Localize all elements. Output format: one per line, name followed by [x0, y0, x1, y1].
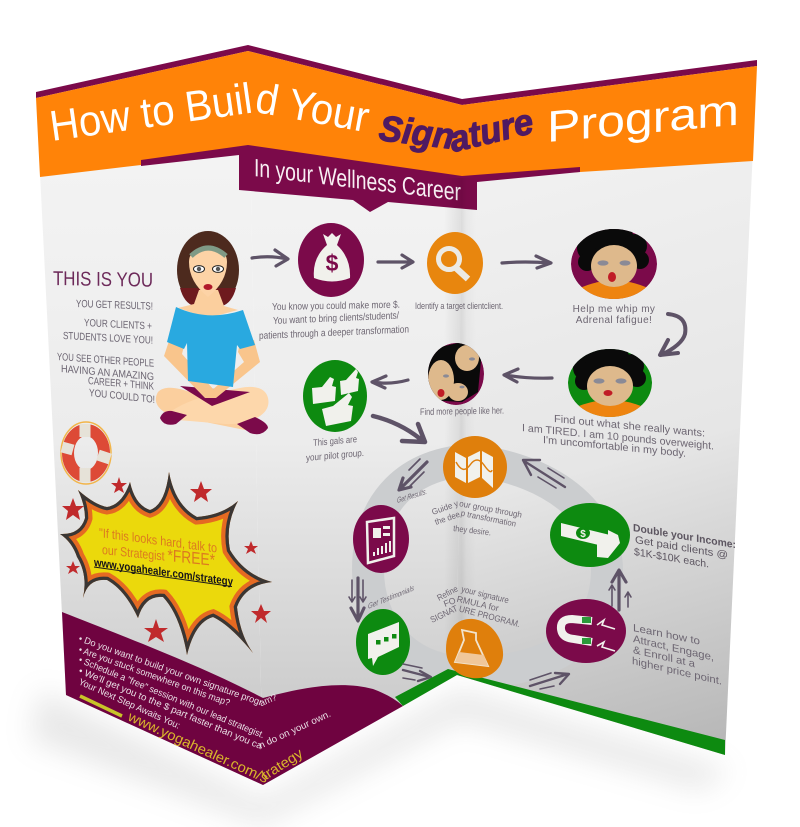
- green bottom strip: [395, 669, 725, 755]
- icon: client face green: [568, 349, 652, 417]
- icon: thumbs up: [303, 360, 367, 432]
- icon: group of women: [428, 340, 484, 405]
- icon: money bag: $: [326, 250, 339, 276]
- arrows: magnet to dollar: [609, 570, 631, 610]
- text: double your income: Double your Income:: [633, 522, 736, 551]
- callout link: www.yogahealer.com/strategy: [93, 557, 233, 589]
- illustration: seated woman: [156, 231, 268, 434]
- header orange band: [36, 51, 757, 178]
- arrow: group to thumbs: [372, 376, 408, 388]
- text: double your income: $1K-$10K each.: [634, 546, 709, 571]
- icon: chat bubble: [356, 609, 410, 675]
- neck: [178, 290, 238, 318]
- text: guide your group: [432, 501, 522, 536]
- text: pilot group: your pilot group.: [306, 448, 364, 464]
- eyes: [194, 266, 204, 272]
- shoes: [160, 411, 187, 425]
- panel: right brochure panel: [457, 62, 757, 755]
- icon: dollar bill hand: [550, 503, 630, 567]
- text block: call to action bullets: • Schedule a "free" session with our lead strategist.: [79, 658, 262, 738]
- text block: you get results: CAREER + THINK: [88, 375, 154, 393]
- purple top edge of header: [36, 45, 757, 105]
- text: pilot group: This gals are: [313, 434, 357, 449]
- text: learn how to: Learn how to: [633, 622, 700, 648]
- callout text: [99, 525, 217, 570]
- text: guide your group: the deep transformation: [434, 511, 516, 527]
- arrow: curved down: [660, 314, 685, 355]
- callout text: "If this looks hard, talk to: [99, 525, 217, 556]
- text: find out: [522, 413, 714, 460]
- text block: you get results: YOUR CLIENTS +: [84, 317, 152, 333]
- lips: [204, 284, 212, 290]
- icon: dollar bill hand: $: [580, 529, 586, 540]
- text: learn how to: [632, 622, 722, 688]
- title: How to Build Your: [51, 82, 370, 140]
- text block: you get results: YOU SEE OTHER PEOPLE: [57, 351, 154, 370]
- text: you know: [259, 300, 409, 342]
- text: help me: Adrenal fafigue!: [576, 315, 652, 326]
- link: website: www.yogahealer.com/strategy: [129, 713, 302, 782]
- purple bottom wave: [62, 612, 403, 785]
- panel: left brochure panel: [36, 46, 263, 785]
- arrow: money to search: [378, 255, 413, 268]
- text block: you get results: HAVING AN AMAZING: [61, 363, 154, 383]
- icon: report document: [353, 505, 409, 573]
- callout text: our Strategist *FREE*: [102, 539, 215, 570]
- text: refine formula: Refine your signature: [436, 587, 508, 603]
- shirt: [167, 307, 255, 387]
- label: get testimonials: Get Testimonials: [368, 583, 414, 611]
- text: learn how to: higher price point.: [632, 655, 722, 688]
- text: refine formula: FORMULA for: [444, 596, 499, 611]
- icon: client face orange shirt: [571, 229, 657, 299]
- arrow: client to group: [504, 369, 552, 382]
- text: help me: Help me whip my: [573, 304, 655, 315]
- text: you know: You know you could make more $.: [272, 300, 400, 313]
- title: [51, 82, 739, 153]
- banner: In your Wellness Career: [141, 145, 580, 212]
- text: learn how to: & Enroll at a: [633, 644, 695, 670]
- starburst callout: [60, 472, 272, 655]
- icon: map: [443, 436, 507, 498]
- label: get results: Get Results.: [397, 487, 427, 505]
- icon: money bag: [298, 223, 364, 297]
- text: pilot group: [306, 434, 364, 464]
- text: refine formula: SIGNATURE PROGRAM.: [430, 605, 519, 627]
- text: identify: Identify a target clientclient.: [415, 301, 503, 312]
- icon: life preserver: [61, 422, 111, 484]
- bottom cycle ring: [368, 460, 607, 672]
- text: double your income: [633, 522, 736, 571]
- text: find out: Find out what she really wants:: [554, 413, 705, 440]
- text: double your income: Get paid clients @: [635, 534, 728, 562]
- burst shape: [60, 472, 272, 655]
- text: help me: [573, 304, 655, 326]
- legs: [156, 388, 255, 430]
- text block: you get results: YOU GET RESULTS!: [76, 298, 153, 313]
- ground shadow: [30, 690, 730, 825]
- arrow: search to client: [502, 256, 551, 268]
- headband: [191, 248, 226, 256]
- arrow: woman to money: [252, 250, 288, 266]
- text block: call to action bullets: • We'll get you to the $ part faster than you can do on your own.: [80, 669, 331, 750]
- hair: [177, 231, 239, 309]
- title script word: Signature: [378, 114, 532, 153]
- arrow: thumbs to cycle: [373, 416, 425, 442]
- title end word: Program: [547, 86, 739, 152]
- arrows: flask to magnet: [530, 673, 569, 689]
- text block: you get results: [57, 298, 155, 406]
- arrow: yellow bar: [80, 696, 122, 716]
- text: you know: patients through a deeper transformation: [259, 324, 409, 342]
- arrows: chat to flask: [403, 664, 431, 681]
- text block: you get results: YOU COULD TO!: [89, 387, 155, 406]
- arms: [164, 338, 216, 398]
- arrows: doc to chat: [349, 578, 366, 621]
- text: find out: I'm uncomfortable in my body.: [543, 434, 686, 460]
- icon: magnifying glass: [427, 232, 483, 294]
- fold shading: [444, 178, 476, 675]
- text: guide your group: they desire.: [454, 525, 490, 536]
- text: guide your group: Guide your group through: [432, 501, 522, 518]
- arrows: map to doc: [399, 459, 427, 490]
- text: learn how to: Attract, Engage,: [633, 633, 714, 664]
- face: [189, 248, 227, 297]
- text: refine formula: [430, 587, 519, 627]
- banner text: In your Wellness Career: [254, 154, 461, 207]
- panel: middle brochure panel: [248, 46, 462, 785]
- heading: THIS IS YOU: THIS IS YOU: [53, 268, 153, 292]
- icon: flask: [446, 619, 503, 678]
- arrows: dollar to map: [523, 460, 565, 488]
- text block: call to action bullets: • Are you stuck somewhere on this map?: [79, 648, 230, 706]
- text block: call to action bullets: Your Next Step Awaits You:: [80, 678, 180, 729]
- icon: horseshoe magnet: [546, 599, 626, 663]
- text: find more: Find more people like her.: [420, 406, 504, 418]
- text: you know: You want to bring clients/students/: [273, 310, 399, 327]
- skirt: [180, 386, 250, 406]
- stars: [62, 477, 271, 642]
- text: find out: I am TIRED. I am 10 pounds overweight.: [522, 422, 714, 452]
- text block: you get results: STUDENTS LOVE YOU!: [63, 330, 153, 347]
- text block: call to action bullets: • Do you want to build your own signature program?: [79, 637, 276, 706]
